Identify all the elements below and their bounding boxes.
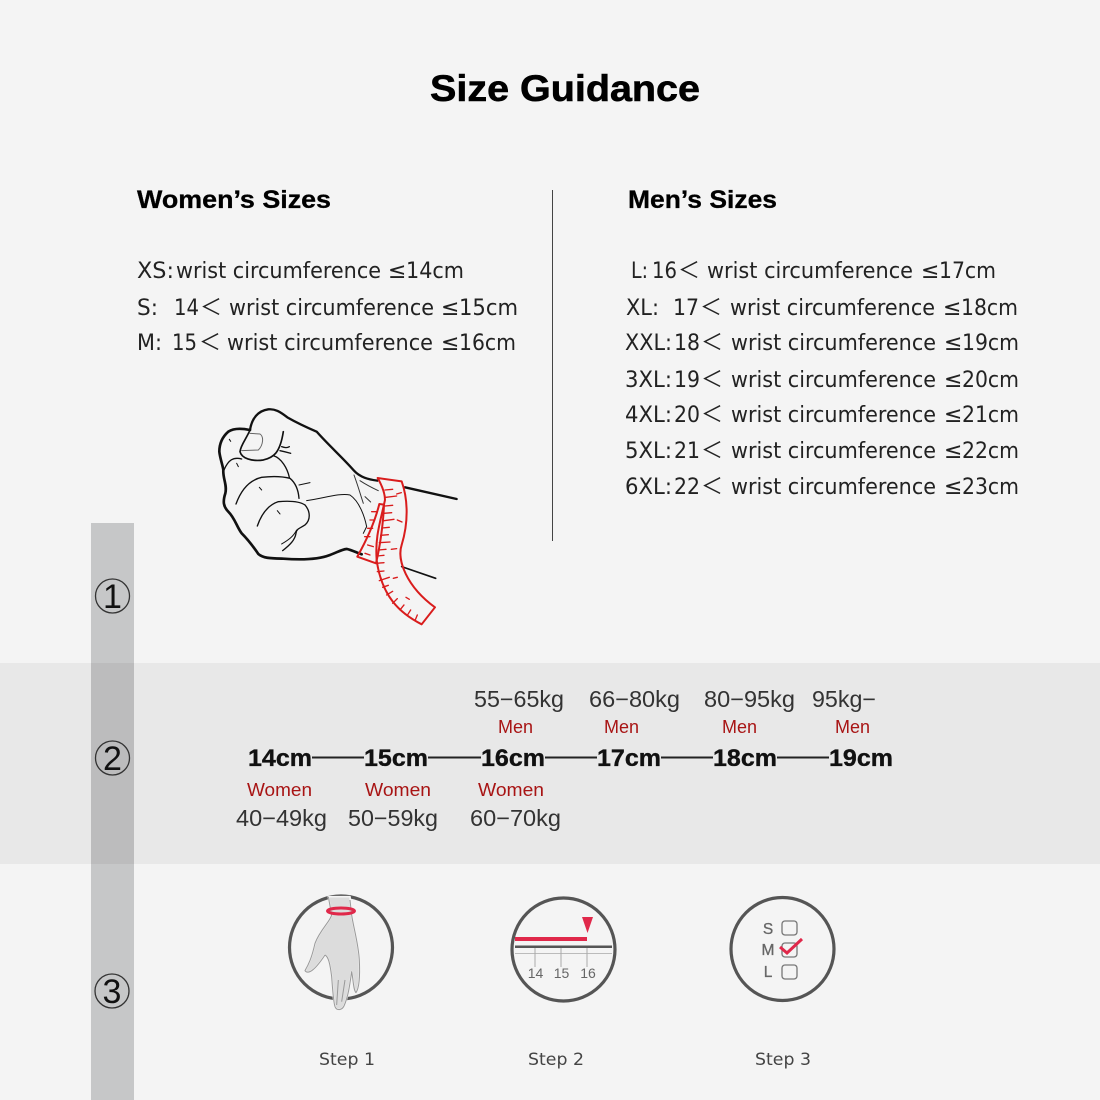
size line 4XL: ＜ [701, 397, 723, 429]
step number 1 [96, 578, 130, 616]
step captions: Step 2 [528, 1050, 584, 1070]
size line L: ＜ [678, 253, 700, 285]
heading: men's sizes: Men’s Sizes [628, 186, 777, 214]
size line 5XL: ＜ [701, 433, 723, 465]
size line XS: ≤ [388, 259, 406, 284]
size line 6XL: ＜ [701, 469, 723, 501]
step number 3: 3 [103, 973, 121, 1011]
divider [552, 190, 553, 541]
icon: step 2 ruler: 14 [528, 965, 543, 981]
size line L [631, 253, 996, 285]
size line XXL: 19cm [962, 331, 1019, 356]
wrist scale: 15cm [364, 745, 428, 772]
size line 3XL: ≤ [944, 368, 962, 393]
women labels: Women [478, 780, 544, 800]
wrist scale: 16cm [481, 745, 545, 772]
size line XL [626, 290, 1018, 322]
size line XL: ≤ [943, 296, 961, 321]
men's weights: 55−65kg [474, 686, 564, 712]
men's weights: 80−95kg [704, 686, 795, 712]
size line 3XL: ＜ [701, 362, 723, 394]
size line XXL: ≤ [944, 331, 962, 356]
size line 6XL: 23cm [962, 475, 1019, 500]
size line 3XL: 19 [674, 368, 700, 393]
size line XL: 18cm [961, 296, 1018, 321]
size line XL: 17 [673, 296, 699, 321]
step captions: Step 1 [319, 1050, 375, 1070]
size line 4XL: 4XL: [625, 403, 672, 428]
size line XXL: wrist circumference [731, 331, 936, 356]
step captions [319, 1050, 811, 1070]
size line M: 15 [172, 331, 197, 356]
wrist scale [248, 745, 893, 772]
women's weights: 60−70kg [470, 805, 561, 831]
women labels: Women [247, 780, 312, 800]
size line 3XL: 20cm [962, 368, 1019, 393]
women labels: Women [365, 780, 431, 800]
icon: step 3 size checklist: S [763, 921, 773, 938]
men labels: Men [722, 717, 757, 737]
size line L: wrist circumference [707, 259, 913, 284]
icon: step 2 ruler [512, 898, 615, 1001]
size line S [137, 290, 518, 322]
size line M: wrist circumference [227, 331, 433, 356]
step rail [91, 523, 134, 1100]
step captions: Step 3 [755, 1050, 811, 1070]
size line 6XL: 22 [674, 475, 700, 500]
men's weights: 66−80kg [589, 686, 680, 712]
icon: step 3 size checklist [731, 898, 834, 1000]
icon: fist with measuring tape [219, 409, 457, 624]
size line 5XL [625, 433, 1019, 465]
women labels [247, 780, 544, 800]
size line 4XL [625, 397, 1019, 429]
size line 5XL: 22cm [962, 439, 1019, 464]
size line L: 16 [652, 259, 677, 284]
size line S: 15cm [459, 296, 518, 321]
men labels: Men [498, 717, 533, 737]
size line S: ＜ [200, 290, 222, 322]
size line L: ≤ [921, 259, 939, 284]
size line 3XL: wrist circumference [731, 368, 936, 393]
size line 5XL: 5XL: [625, 439, 672, 464]
panel: women's sizes [137, 186, 518, 357]
size line 4XL: wrist circumference [731, 403, 936, 428]
wrist scale: 18cm [713, 745, 777, 772]
icon: step 3 size checklist: L [764, 964, 773, 981]
step number 3 [95, 973, 129, 1011]
size line XXL: XXL: [625, 331, 672, 356]
size line 3XL [625, 362, 1019, 394]
size line 3XL: 3XL: [625, 368, 672, 393]
size line 5XL: wrist circumference [731, 439, 936, 464]
size line 4XL: 21cm [962, 403, 1019, 428]
step number 1: 1 [103, 578, 122, 616]
women's weights [236, 805, 561, 831]
size line XXL [625, 325, 1019, 357]
size line 6XL: 6XL: [625, 475, 672, 500]
heading: women's sizes: Women’s Sizes [137, 186, 331, 214]
size line S: wrist circumference [229, 296, 434, 321]
size line XS [137, 259, 464, 284]
women's weights: 40−49kg [236, 805, 327, 831]
size line M [137, 325, 516, 357]
size line XS: wrist circumference [176, 259, 381, 284]
size line M: ≤ [441, 331, 459, 356]
size line L: L: [631, 259, 648, 284]
men's weights [474, 686, 876, 712]
size line XL: ＜ [700, 290, 722, 322]
icon: step 1 wrist [290, 896, 392, 1010]
size line M: ＜ [199, 325, 221, 357]
size line 5XL: ≤ [944, 439, 962, 464]
size line S: S: [137, 296, 158, 321]
men labels: Men [835, 717, 870, 737]
size line XS: XS: [137, 259, 174, 284]
icon: step 3 size checklist: M [762, 942, 774, 959]
size line 6XL [625, 469, 1019, 501]
size line M: M: [137, 331, 162, 356]
size line XS: 14cm [406, 259, 464, 284]
title: Size Guidance [430, 68, 700, 109]
size line L: 17cm [939, 259, 996, 284]
size line XL: XL: [626, 296, 659, 321]
icon: step 2 ruler: 15 [554, 965, 569, 981]
size line XL: wrist circumference [730, 296, 935, 321]
women's weights: 50−59kg [348, 805, 438, 831]
wrist scale: 14cm [248, 745, 312, 772]
size line S: ≤ [441, 296, 459, 321]
men labels [498, 717, 870, 737]
size line 6XL: ≤ [944, 475, 962, 500]
size line 4XL: ≤ [944, 403, 962, 428]
icon: step 2 ruler: 16 [580, 965, 596, 981]
size line 6XL: wrist circumference [731, 475, 936, 500]
men labels: Men [604, 717, 639, 737]
size line S: 14 [174, 296, 199, 321]
weight band [0, 663, 1100, 864]
size line 4XL: 20 [674, 403, 700, 428]
step number 2 [96, 740, 130, 778]
size line XXL: 18 [674, 331, 700, 356]
size line 5XL: 21 [674, 439, 700, 464]
size line M: 16cm [459, 331, 516, 356]
panel: men's sizes [625, 186, 1019, 501]
men's weights: 95kg− [812, 686, 876, 712]
wrist scale: 17cm [597, 745, 661, 772]
wrist scale: 19cm [829, 745, 893, 772]
size line XXL: ＜ [701, 325, 723, 357]
step number 2: 2 [103, 740, 122, 778]
